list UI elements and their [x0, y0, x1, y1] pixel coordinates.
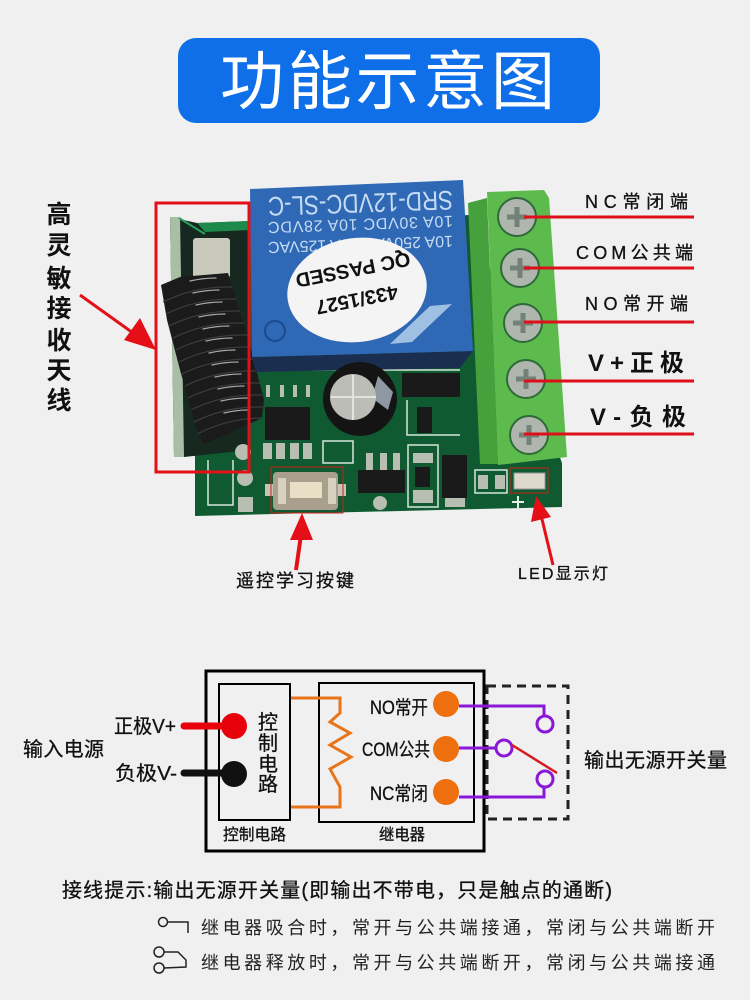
- plus mark: [512, 496, 524, 508]
- positive input: 正极V+: [114, 715, 176, 738]
- LED label: LED显示灯: [518, 565, 608, 583]
- vertical antenna label: 天: [46, 357, 72, 385]
- control circuit caption: 控制电路: [223, 826, 286, 844]
- terminal labels: COM公共端: [576, 243, 693, 263]
- LED: [514, 473, 545, 489]
- relay released note: 继电器释放时，常开与公共端断开，常闭与公共端接通: [201, 953, 715, 973]
- dashed output switch box: [487, 686, 568, 819]
- control circuit box: [219, 684, 290, 820]
- button label: 遥控学习按键: [236, 571, 354, 591]
- antenna coil: [161, 273, 264, 444]
- icon: relay released: [154, 947, 186, 973]
- vertical antenna label: 接: [46, 295, 72, 323]
- switch contact wiring: [459, 706, 553, 797]
- relay coil: [291, 698, 351, 807]
- terminal block: [468, 190, 567, 465]
- input power label: 输入电源: [23, 738, 104, 761]
- positive input: [114, 713, 247, 739]
- relay terminals: [433, 691, 459, 805]
- relay engaged note: 继电器吸合时，常开与公共端接通，常闭与公共端断开: [201, 918, 715, 938]
- LED highlight box: [510, 468, 548, 493]
- relay body: 10A 250VAC 10A 125VAC: [268, 232, 453, 255]
- solder pads: [235, 385, 505, 512]
- output label: 输出无源开关量: [584, 749, 727, 772]
- relay terminal labels: NC常闭: [370, 783, 428, 805]
- terminal labels: V+正极: [588, 350, 684, 377]
- PCB board: [195, 215, 562, 516]
- capacitor: [323, 362, 397, 436]
- control circuit vertical label: 制: [258, 732, 278, 755]
- vertical antenna label: [46, 201, 72, 415]
- control circuit vertical label: 路: [258, 773, 278, 796]
- relay terminal labels: NO常开: [370, 697, 428, 719]
- terminal labels: NO常开端: [585, 294, 688, 314]
- antenna highlight box: [156, 203, 249, 472]
- terminal labels: V-负极: [590, 404, 686, 431]
- relay caption: 继电器: [379, 826, 425, 844]
- title banner: [178, 38, 600, 123]
- terminal labels: NC常闭端: [585, 192, 688, 212]
- module outer box: [206, 671, 484, 851]
- terminal labels: [576, 192, 693, 431]
- terminal leader lines: [524, 217, 694, 434]
- relay body: 10A 30VDC 10A 28VDC: [268, 212, 453, 235]
- push button: [265, 472, 346, 510]
- relay label sticker: 433/1527: [314, 280, 400, 318]
- relay body: SRD-12VDC-SL-C: [267, 185, 453, 221]
- control circuit vertical label: [258, 711, 278, 796]
- relay label sticker: [280, 229, 434, 351]
- control circuit vertical label: 控: [258, 711, 278, 734]
- relay body: [250, 180, 473, 372]
- title banner: 功能示意图: [220, 46, 555, 118]
- wiring diagram: [23, 671, 727, 851]
- vertical antenna label: 敏: [46, 265, 72, 293]
- button highlight box: [271, 467, 343, 513]
- control circuit vertical label: 电: [258, 753, 278, 776]
- negative input: [115, 761, 247, 787]
- photo: relay receiver board: [161, 180, 567, 516]
- arrow: to button: [290, 513, 313, 570]
- relay terminal labels: COM公共: [362, 739, 430, 761]
- vertical antenna label: 高: [46, 201, 72, 229]
- relay terminal labels: [362, 697, 430, 805]
- switch arm: [512, 745, 557, 773]
- arrow: to LED: [531, 496, 553, 565]
- vertical antenna label: 收: [46, 327, 72, 355]
- relay box: [319, 683, 474, 822]
- receiver module: [170, 217, 250, 457]
- PCB silkscreen traces: [208, 370, 507, 507]
- vertical antenna label: 灵: [46, 232, 72, 260]
- chips: [265, 373, 467, 498]
- negative input: 负极V-: [115, 762, 177, 785]
- wiring note: 接线提示:输出无源开关量(即输出不带电，只是触点的通断): [62, 879, 612, 902]
- icon: relay engaged: [158, 918, 188, 933]
- relay label sticker: QC PASSED: [294, 247, 412, 291]
- vertical antenna label: 线: [46, 387, 72, 415]
- arrow: to antenna: [80, 295, 156, 350]
